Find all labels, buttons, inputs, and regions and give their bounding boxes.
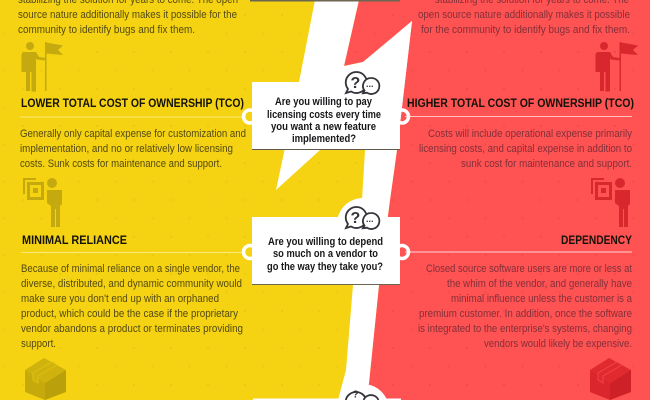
icon: person with flag, yellow <box>22 42 63 92</box>
left text: minimal reliance body: product, which could be the case if the proprietary <box>21 308 239 320</box>
left text: minimal reliance body <box>21 263 243 350</box>
right text: TCO body: Costs will include operational expense primarily <box>428 128 633 140</box>
icon: cardboard box, yellow <box>25 358 66 400</box>
left text: TCO body <box>20 128 246 170</box>
right text: TCO body: sunk cost for maintenance and support. <box>461 158 632 170</box>
right text: TCO body <box>419 128 633 170</box>
question card 2: so much on a vendor to <box>273 248 378 260</box>
right column text: open source: for the community to identify bugs and fix them. <box>421 24 630 36</box>
panel: red closed source side <box>338 0 650 400</box>
right text: dependency body: vendors would likely be expensive. <box>484 338 632 350</box>
question card 2: go the way they take you? <box>267 261 383 273</box>
question card 1: you want a new feature <box>271 121 376 133</box>
question card 1: implemented? <box>292 133 356 145</box>
right text: dependency body: premium customer. In addition, once the software <box>419 308 632 320</box>
left text: minimal reliance body: support. <box>21 338 56 350</box>
question card 1: Are you willing to pay <box>275 96 373 108</box>
left text: minimal reliance body: vendor abandons a product or terminates providing <box>21 323 243 335</box>
icon: chat bubbles with question mark: ? <box>350 75 360 92</box>
right text: TCO body: licensing costs, and capital expense in addition to <box>419 143 632 155</box>
left text: TCO body: costs. Sunk costs for maintenance and support. <box>20 158 222 170</box>
icon: chat bubbles with question mark <box>346 390 378 400</box>
question card 2: Are you willing to depend <box>268 236 383 248</box>
question card 1 <box>252 63 400 150</box>
icon: person with frames, red <box>591 178 630 227</box>
top card edge <box>250 0 400 2</box>
left text: minimal reliance body: diverse, distributed, and dynamic community would <box>21 278 242 290</box>
left text: minimal reliance body: make sure you don't end up with an orphaned <box>21 293 219 305</box>
connector lines and rings, row 1 <box>20 110 632 123</box>
connector lines and rings, row 2 <box>21 246 632 258</box>
right column text: open source <box>418 0 630 36</box>
icon: chat bubbles with question mark: ... <box>366 79 374 89</box>
left column text: open source <box>18 0 238 36</box>
heading: dependency: DEPENDENCY <box>561 233 632 247</box>
icon: chat bubbles with question mark <box>346 72 379 94</box>
right column text: open source: open source nature additionally makes it possible <box>418 9 630 21</box>
question card 3, cropped at bottom <box>253 384 401 400</box>
left text: TCO body: implementation, and no or relatively low licensing <box>20 143 233 155</box>
icon: person with flag, red <box>596 42 638 92</box>
question card 2 <box>252 198 400 285</box>
icon: chat bubbles with question mark: ... <box>366 214 374 224</box>
heading: minimal reliance: MINIMAL RELIANCE <box>22 233 127 247</box>
right text: dependency body <box>418 263 632 350</box>
left column text: open source: source nature additionally makes it possible for the <box>18 9 237 21</box>
question card 1: licensing costs every time <box>267 109 381 121</box>
icon: chat bubbles with question mark: ? <box>350 210 360 227</box>
right text: dependency body: the whim of the vendor, and generally have <box>447 278 632 290</box>
right text: dependency body: minimal influence unless the customer is a <box>451 293 632 305</box>
panel: yellow open source side <box>0 0 400 400</box>
left text: TCO body: Generally only capital expense for customization and <box>20 128 246 140</box>
left text: minimal reliance body: Because of minimal reliance on a single vendor, the <box>21 263 240 275</box>
heading: lower total cost of ownership: LOWER TOTAL COST OF OWNERSHIP (TCO) <box>21 96 244 110</box>
lightning bolt divider <box>276 0 412 400</box>
icon: cardboard box, red <box>590 358 631 400</box>
left column text: open source: community to identify bugs and fix them. <box>18 24 195 36</box>
icon: person with frames, yellow <box>23 178 62 227</box>
icon: chat bubbles with question mark <box>346 207 379 229</box>
